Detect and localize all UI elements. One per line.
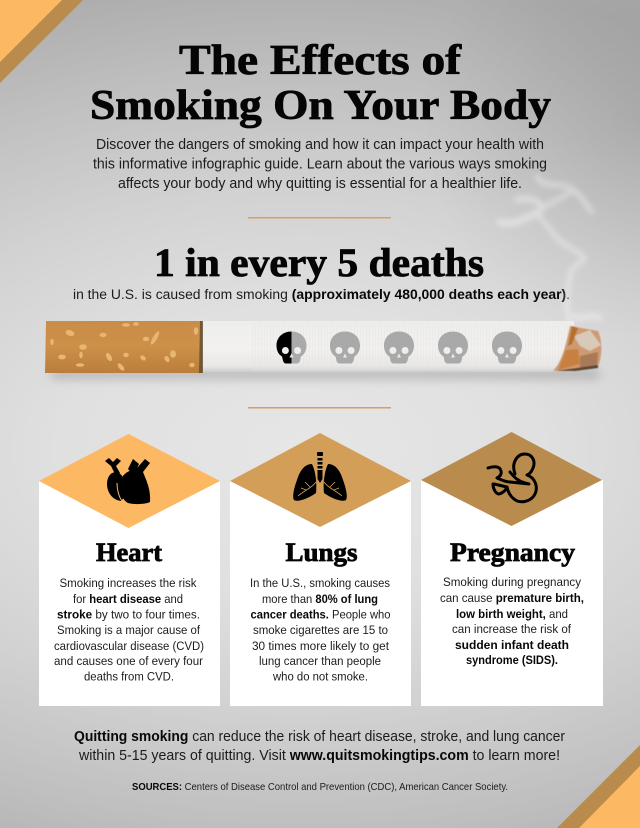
icon: heart	[105, 458, 150, 504]
skull 3	[384, 332, 414, 364]
cigarette shadow	[50, 369, 600, 379]
title: Smoking On Your Body	[90, 83, 551, 129]
icon: fetus	[488, 454, 536, 502]
statistic headline: 1 in every 5 deaths	[154, 240, 484, 285]
divider top	[248, 217, 391, 218]
body text: and causes one of every four	[54, 654, 203, 668]
heading: Pregnancy	[450, 538, 575, 567]
smoke	[500, 177, 600, 322]
intro paragraph: affects your body and why quitting is essential for a healthier life.	[118, 176, 522, 192]
body text: In the U.S., smoking causes	[250, 576, 390, 590]
body text: can cause premature birth,	[440, 591, 584, 605]
body text: Smoking during pregnancy	[443, 575, 582, 589]
skull 4	[438, 332, 468, 364]
body text	[250, 576, 391, 684]
body text: low birth weight, and	[456, 607, 568, 621]
intro paragraph: this informative infographic guide. Learn about the various ways smoking	[93, 156, 547, 172]
body text: deaths from CVD.	[84, 670, 174, 684]
skull 2	[330, 332, 360, 364]
sources: SOURCES: Centers of Disease Control and Prevention (CDC), American Cancer Society.	[132, 782, 508, 793]
diamond	[421, 432, 602, 526]
body text: who do not smoke.	[272, 670, 368, 684]
cigarette filter	[45, 321, 203, 373]
card background	[230, 481, 411, 706]
intro paragraph	[93, 137, 547, 192]
card background	[421, 480, 603, 706]
body text	[440, 575, 584, 667]
corner decoration: bottom right	[557, 745, 640, 828]
body text: sudden infant death	[455, 638, 569, 652]
body text: for heart disease and	[73, 592, 183, 606]
body text: syndrome (SIDS).	[466, 653, 558, 667]
title: The Effects of	[179, 38, 462, 84]
closing statement: within 5-15 years of quitting. Visit www.quitsmokingtips.com to learn more!	[78, 748, 560, 764]
body text: 30 times more likely to get	[252, 639, 390, 653]
burnt tip	[553, 326, 601, 371]
panel: lungs	[230, 433, 411, 706]
cigarette paper	[202, 321, 574, 372]
skull half filled	[276, 332, 306, 364]
body text: smoke cigarettes are 15 to	[253, 623, 388, 637]
body text	[54, 576, 204, 684]
heading: Lungs	[286, 538, 358, 567]
diamond	[230, 433, 411, 527]
icon: lungs	[293, 452, 347, 501]
cigarette	[45, 321, 601, 379]
intro paragraph: Discover the dangers of smoking and how it can impact your health with	[96, 137, 544, 153]
body text: more than 80% of lung	[262, 592, 378, 606]
body text: cardiovascular disease (CVD)	[54, 639, 204, 653]
title	[90, 38, 551, 129]
body text: Smoking is a major cause of	[57, 623, 201, 637]
body text: lung cancer than people	[259, 654, 381, 668]
body text: cancer deaths. People who	[250, 608, 391, 622]
body text: Smoking increases the risk	[60, 576, 197, 590]
heading: Heart	[96, 538, 162, 567]
panel: pregnancy	[421, 432, 603, 706]
card background	[39, 481, 220, 706]
closing statement: Quitting smoking can reduce the risk of heart disease, stroke, and lung cancer	[74, 729, 565, 745]
closing statement	[74, 729, 565, 764]
statistic subtext: in the U.S. is caused from smoking (approximately 480,000 deaths each year).	[73, 287, 570, 303]
panel: heart	[39, 434, 220, 706]
skull 5	[492, 332, 522, 364]
diamond	[39, 434, 220, 528]
corner decoration: top left	[0, 0, 83, 83]
divider bottom	[248, 407, 391, 408]
body text: stroke by two to four times.	[57, 608, 200, 622]
body text: can increase the risk of	[452, 622, 572, 636]
